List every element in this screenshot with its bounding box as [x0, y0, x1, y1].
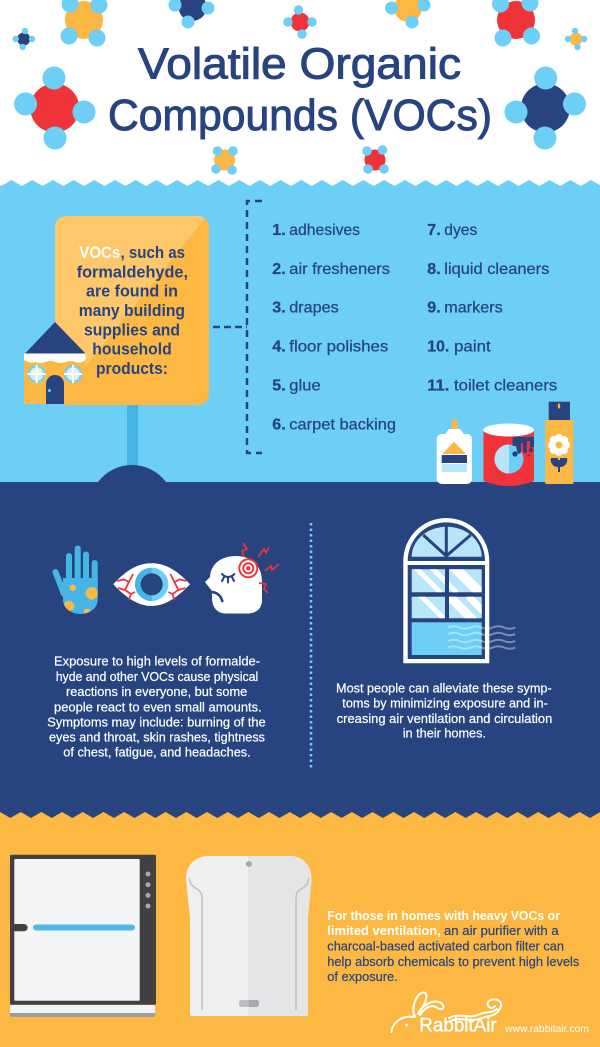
panel: header background	[0, 0, 600, 186]
sign text: , such as	[120, 243, 185, 262]
molecule: orange top right	[385, 0, 430, 28]
list: left column: drapes	[289, 300, 339, 317]
list: right column: 7.	[427, 222, 441, 239]
sign base dome	[98, 465, 166, 482]
text: alleviation	[336, 682, 552, 741]
title	[108, 39, 492, 140]
panel: symptoms background	[0, 482, 600, 818]
list: left column: carpet backing	[289, 416, 396, 433]
list: left column: floor polishes	[289, 339, 388, 356]
text: purifier recommendation	[327, 908, 580, 984]
sign text: products:	[96, 359, 168, 378]
text: alleviation: creasing air ventilation and circulation	[337, 712, 552, 726]
icon: hand with rash	[56, 548, 98, 615]
list: left column: 5.	[272, 378, 286, 395]
panel: sources background	[0, 180, 600, 482]
website url: www.rabbitair.com	[504, 1023, 589, 1035]
sign text: are found in	[86, 282, 178, 301]
text: symptoms: Symptoms may include: burning of the	[47, 715, 266, 729]
icon: glue bottle	[437, 419, 472, 484]
sign shine	[55, 216, 207, 367]
text: alleviation: in their homes.	[403, 727, 486, 741]
list: left column: glue	[289, 378, 321, 395]
list: right column: toilet cleaners	[454, 378, 557, 395]
icon: house	[24, 322, 86, 404]
icon: irritated eye	[113, 563, 190, 606]
list: left column: 2.	[272, 261, 286, 278]
logo: Rabbit Air	[392, 992, 501, 1037]
molecule: tiny orange right	[565, 28, 587, 50]
panel: sign	[55, 216, 209, 405]
title: Volatile Organic	[138, 39, 461, 88]
text: purifier recommendation: For those in homes with heavy VOCs or	[327, 908, 560, 923]
list: right column: liquid cleaners	[444, 261, 549, 278]
sign text	[77, 243, 188, 378]
sign post	[127, 405, 138, 467]
list: right column: 8.	[427, 261, 441, 278]
text: purifier recommendation: limited ventilation,	[327, 923, 441, 938]
list: left column: 3.	[272, 300, 286, 317]
list: left column: 6.	[272, 416, 286, 433]
molecule: orange top left	[60, 0, 108, 46]
text: purifier recommendation: charcoal-based activated carbon filter can	[327, 939, 564, 954]
list: right column: markers	[444, 300, 503, 317]
sign text: supplies and	[84, 320, 180, 339]
molecules decoration	[12, 0, 587, 175]
list: left column: 4.	[272, 339, 286, 356]
text: symptoms: people react to even small amounts.	[54, 700, 262, 714]
text: alleviation: Most people can alleviate these symp-	[336, 682, 552, 696]
list: left column: adhesives	[289, 222, 360, 239]
icon: window	[403, 518, 515, 663]
list: right column: dyes	[444, 222, 477, 239]
molecule: large red left	[14, 66, 96, 150]
list: left column: air fresheners	[289, 261, 390, 278]
text: symptoms	[47, 655, 266, 760]
list: right column: paint	[454, 339, 491, 356]
text: symptoms: of chest, fatigue, and headaches.	[63, 746, 251, 760]
list: left column: 1.	[272, 222, 286, 239]
molecule: red top right	[492, 0, 540, 46]
molecule: large navy right	[504, 66, 586, 150]
molecule: small red top	[283, 5, 317, 39]
list: right column	[427, 222, 557, 395]
text: alleviation: toms by minimizing exposure and in-	[342, 697, 548, 711]
sign text: household	[92, 340, 172, 359]
text: symptoms: hyde and other VOCs cause physical	[56, 670, 258, 684]
dashed bracket	[213, 201, 262, 453]
molecule: navy top	[168, 0, 214, 28]
text: symptoms: Exposure to high levels of formalde-	[54, 655, 260, 669]
dotted divider	[310, 523, 312, 768]
text: symptoms: reactions in everyone, but some	[66, 685, 247, 699]
list: left column	[272, 222, 396, 433]
icon: headache	[205, 543, 279, 614]
logo: Rabbit Air: RabbitAir	[419, 1016, 497, 1037]
icon: air purifier front view	[186, 856, 312, 1016]
list: right column: 10.	[427, 339, 449, 356]
sign text: many building	[79, 301, 185, 320]
title: Compounds (VOCs)	[108, 91, 492, 140]
molecule: orange bottom	[211, 146, 238, 175]
list: right column: 11.	[427, 378, 449, 395]
text: symptoms: eyes and throat, skin rashes, tightness	[49, 731, 265, 745]
text: purifier recommendation: of exposure.	[327, 969, 398, 984]
list: right column: 9.	[427, 300, 441, 317]
icon: spray can	[545, 402, 573, 484]
molecule: tiny navy left	[12, 28, 35, 50]
sign text: VOCs	[79, 243, 120, 262]
molecule: red bottom	[362, 145, 389, 174]
icon: paint can	[483, 424, 534, 486]
text: purifier recommendation: an air purifier with a	[444, 923, 559, 938]
icon: air purifier side view	[10, 855, 156, 1017]
panel: purifier background	[0, 818, 600, 1047]
sign text: formaldehyde,	[77, 262, 188, 281]
text: purifier recommendation: help absorb chemicals to prevent high levels	[327, 954, 580, 969]
